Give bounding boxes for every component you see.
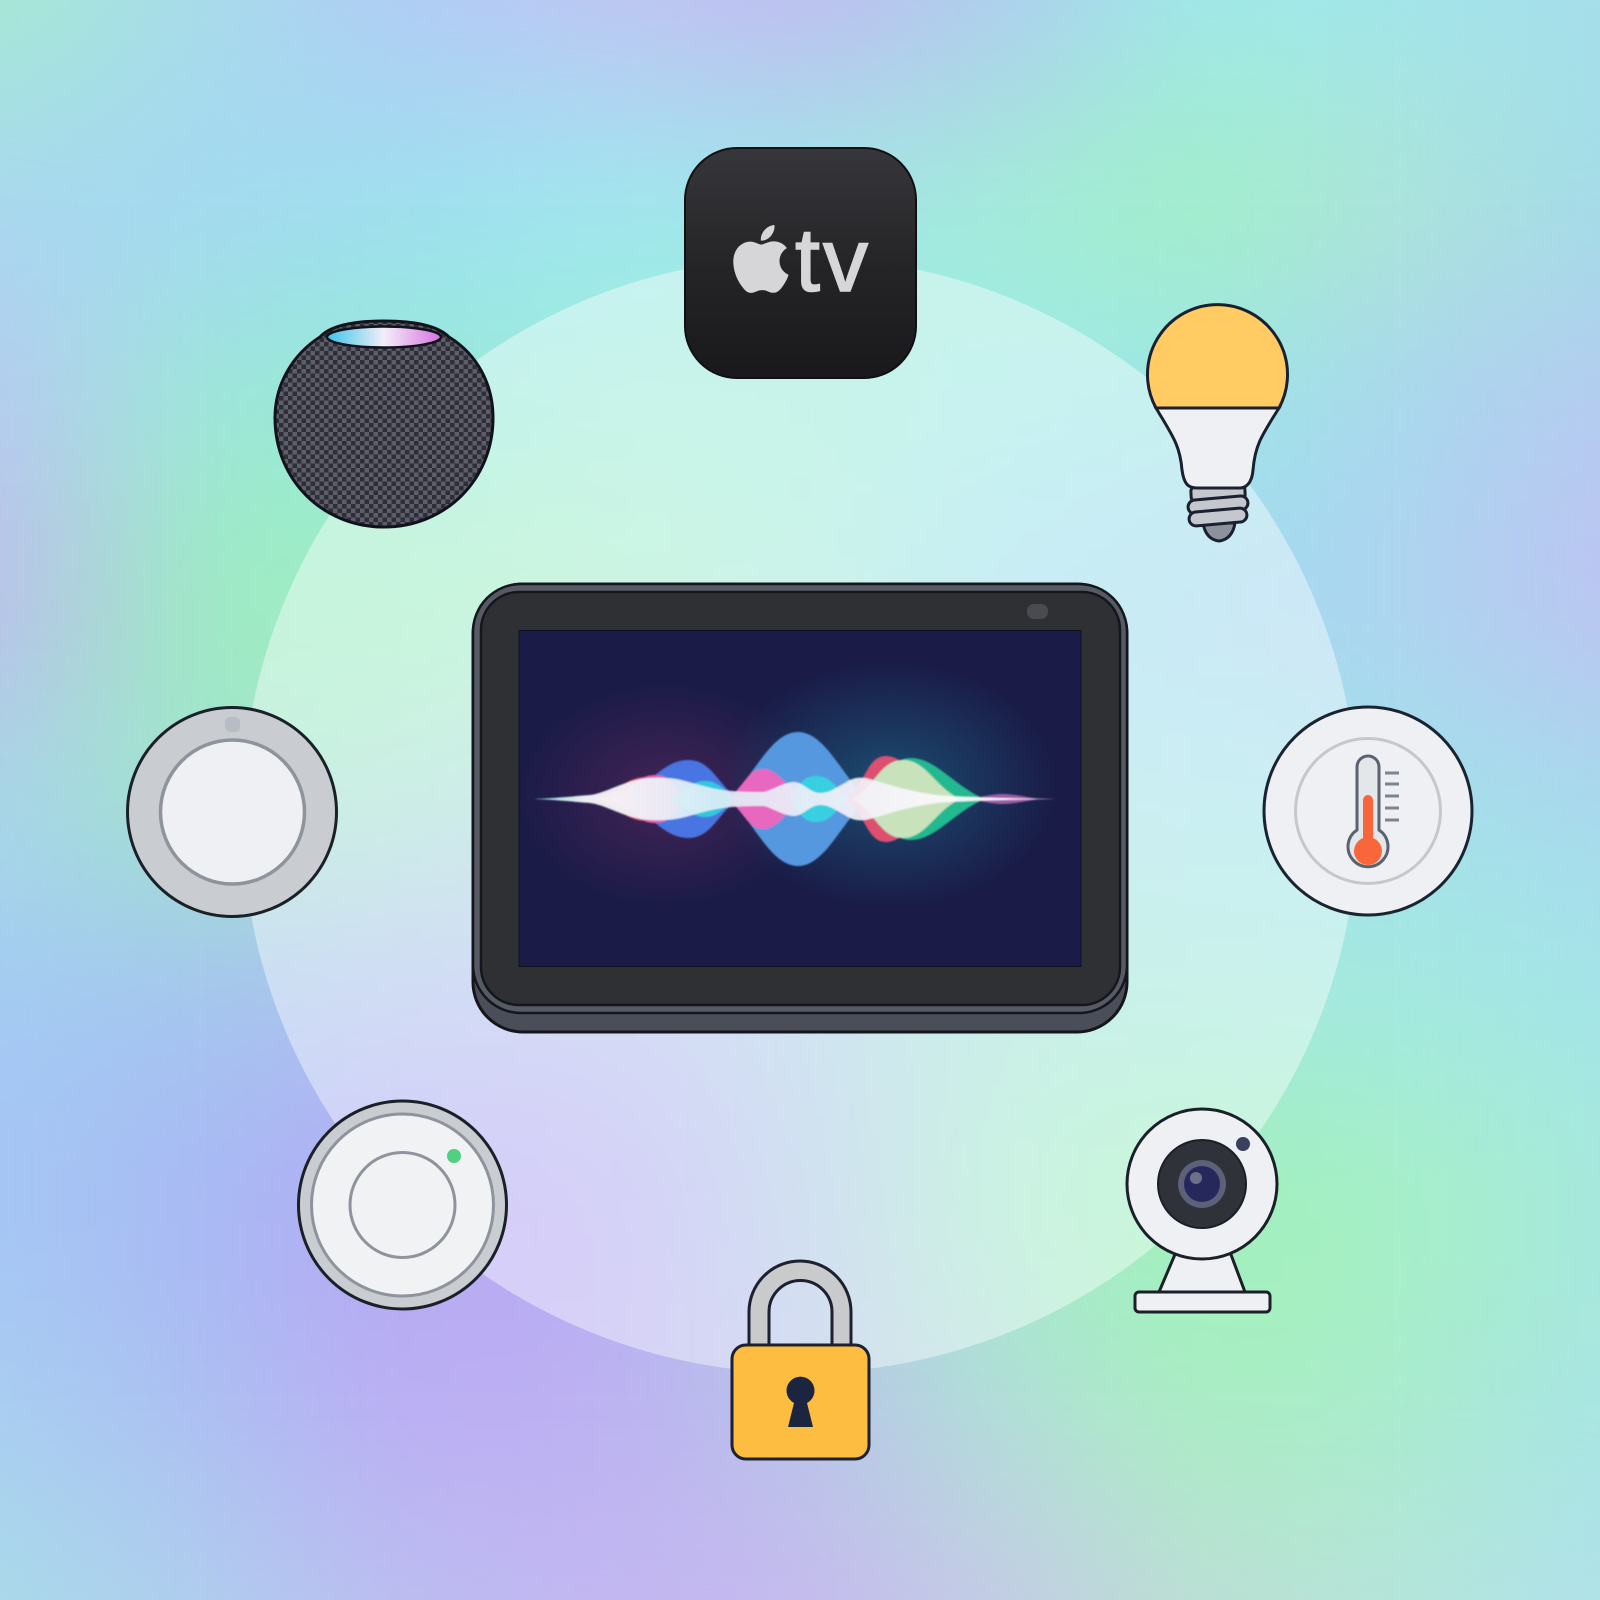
- camera stand: [1159, 1252, 1245, 1292]
- camera dot: [1027, 604, 1048, 619]
- camera base: [1135, 1292, 1270, 1312]
- camera lens: [1178, 1160, 1226, 1208]
- puck indicator: [225, 717, 240, 732]
- device: left smart puck: [128, 708, 336, 916]
- device: HomePod mini speaker: [275, 321, 493, 527]
- bulb screw base: [1188, 485, 1248, 541]
- display bezel: [481, 592, 1120, 1005]
- puck centre button: [160, 740, 304, 884]
- camera lens housing: [1158, 1140, 1246, 1228]
- lock body: [732, 1345, 869, 1459]
- bulb neck: [1156, 408, 1279, 488]
- device: lower smart sensor: [298, 1101, 506, 1309]
- siri light on top: [327, 326, 441, 348]
- lock shackle: [749, 1261, 851, 1345]
- bulb globe: [1148, 305, 1288, 408]
- tv wordmark: tv: [795, 211, 871, 311]
- device: thermostat: [1264, 707, 1472, 915]
- display base layer: [473, 584, 1127, 1032]
- device: security camera: [1127, 1109, 1277, 1312]
- sensor face: [312, 1114, 494, 1296]
- icon: thermometer: [1348, 756, 1399, 867]
- thermostat inner ring: [1296, 738, 1440, 884]
- status led: [447, 1149, 461, 1163]
- translucent central circle: [242, 257, 1358, 1373]
- device: smart padlock: [732, 1261, 869, 1459]
- siri waveform: [534, 732, 1056, 866]
- device: central smart display: [473, 584, 1127, 1032]
- device: Apple TV tile: [685, 148, 916, 378]
- icon: apple logo: [733, 225, 789, 293]
- camera sensor dot: [1236, 1137, 1250, 1151]
- screen: [515, 630, 1082, 967]
- device: smart light bulb: [1148, 305, 1288, 541]
- camera head: [1127, 1109, 1277, 1259]
- display front rim: [473, 584, 1127, 1013]
- keyhole: [787, 1377, 814, 1427]
- sensor inner ring: [350, 1152, 455, 1258]
